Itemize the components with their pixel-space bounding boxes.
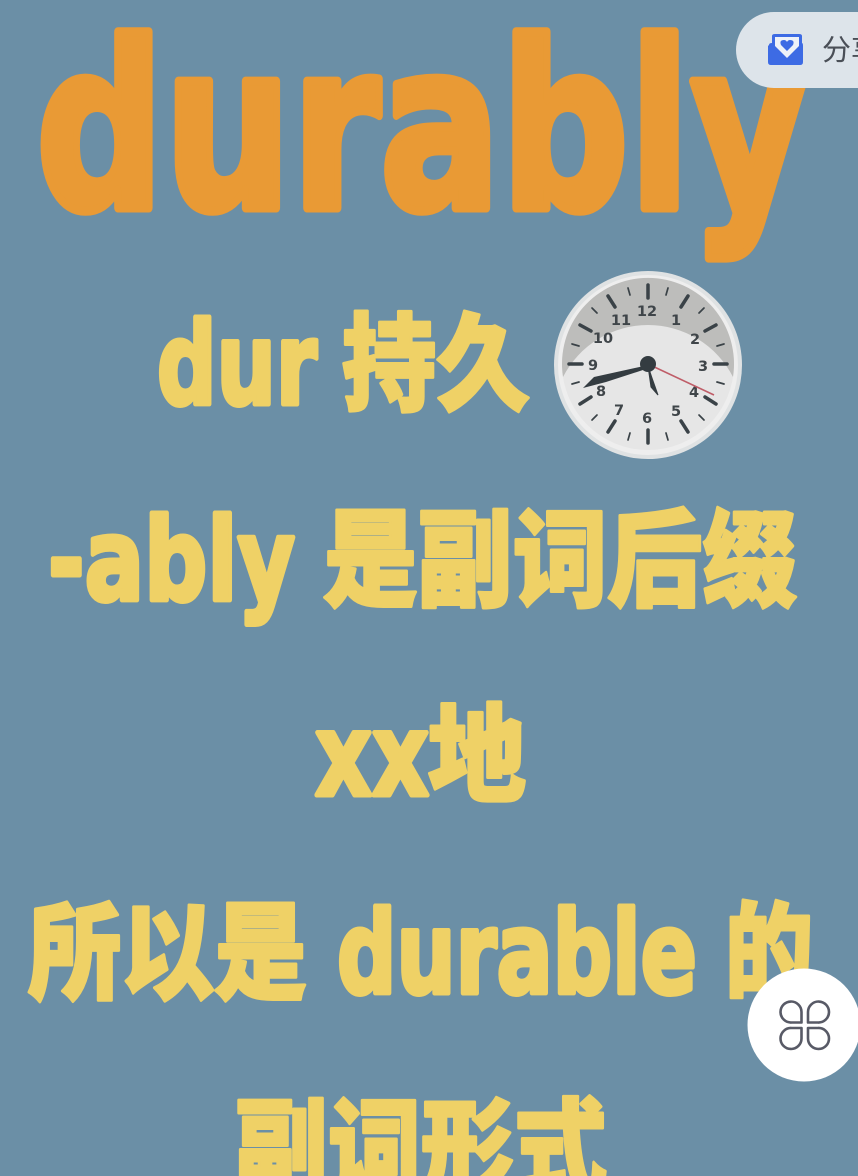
icon: wall clock: 11	[611, 313, 631, 329]
icon: wall clock: 4	[689, 385, 699, 401]
icon: wall clock: 3	[698, 359, 708, 375]
icon: wall clock	[554, 271, 742, 459]
text line: -ably 是副词后缀: -ably	[48, 494, 295, 627]
icon: wall clock: 8	[596, 384, 606, 400]
icon: wall clock: 2	[690, 332, 700, 348]
text line: xx地: xx	[315, 689, 429, 822]
share button	[736, 12, 858, 88]
text line: dur 持久	[157, 298, 530, 431]
text line: 所以是 durable 的: 的	[725, 896, 813, 1014]
icon: wall clock: 6	[642, 411, 652, 427]
text line: xx地: 地	[428, 698, 526, 816]
icon: four petals	[781, 1002, 829, 1049]
text line: dur 持久: 持久	[342, 307, 530, 425]
icon: wall clock: 10	[593, 331, 613, 347]
text line: 所以是 durable 的	[28, 887, 813, 1020]
icon: wall clock: 12	[637, 304, 657, 320]
text line: 所以是 durable 的: durable	[337, 887, 697, 1020]
icon: wall clock: 7	[614, 403, 624, 419]
text line: 所以是 durable 的: 所以是	[28, 896, 307, 1014]
text line: dur 持久: dur	[157, 298, 317, 431]
text line: -ably 是副词后缀: 是副词后缀	[323, 503, 797, 621]
icon: wall clock: 1	[671, 313, 681, 329]
text line: xx地	[315, 689, 526, 822]
icon: wall clock: 9	[588, 358, 598, 374]
floating menu button	[748, 968, 858, 1082]
icon: envelope with heart	[768, 34, 803, 65]
icon: wall clock: 5	[671, 404, 681, 420]
text line: -ably 是副词后缀	[48, 494, 797, 627]
